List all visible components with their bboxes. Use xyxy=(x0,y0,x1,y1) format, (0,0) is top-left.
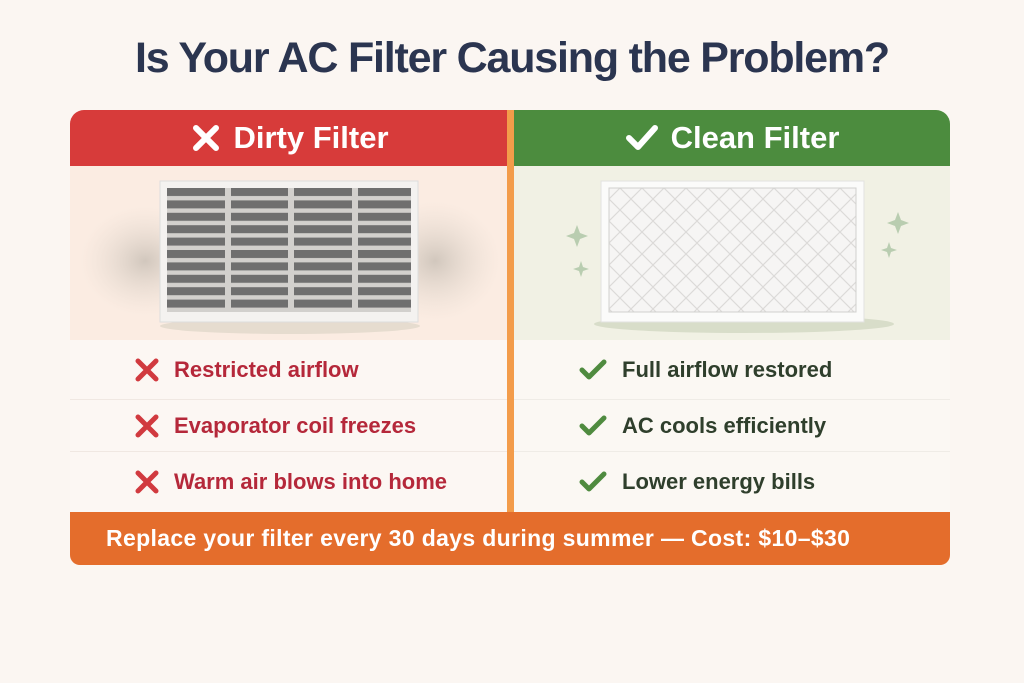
list: clean filter benefits xyxy=(514,356,950,494)
panel: dirty filter xyxy=(70,110,510,512)
divider xyxy=(507,110,514,512)
icon: dirty filter frame xyxy=(160,181,418,322)
icon: clean filter frame xyxy=(601,181,864,322)
item: lower bills: Lower energy bills xyxy=(622,469,815,494)
heading: clean filter: Clean Filter xyxy=(671,120,839,155)
item: restricted airflow: Restricted airflow xyxy=(174,356,359,382)
heading: dirty filter: Dirty Filter xyxy=(233,120,389,155)
item: full airflow: Full airflow restored xyxy=(622,356,832,382)
item: cools efficiently: AC cools efficiently xyxy=(622,412,826,438)
list: dirty filter problems xyxy=(70,356,507,494)
heading: dirty filter xyxy=(70,110,510,166)
callout: replacement banner: Replace your filter every 30 days during summer — Cost: $10–$30 xyxy=(106,525,850,551)
item: cools efficiently xyxy=(514,400,950,452)
image area: clean filter xyxy=(514,166,950,340)
item: warm air: Warm air blows into home xyxy=(174,469,447,494)
image area: dirty filter xyxy=(70,166,510,340)
item: restricted airflow xyxy=(70,340,510,400)
panel: clean filter xyxy=(514,110,950,512)
icon: sparkles xyxy=(566,212,909,277)
item: full airflow xyxy=(514,340,950,400)
item: coil freezes xyxy=(70,400,510,452)
callout: replacement banner xyxy=(70,512,950,565)
heading: clean filter xyxy=(514,110,950,166)
item: coil freezes: Evaporator coil freezes xyxy=(174,412,416,438)
title: Is Your AC Filter Causing the Problem? xyxy=(135,34,889,82)
